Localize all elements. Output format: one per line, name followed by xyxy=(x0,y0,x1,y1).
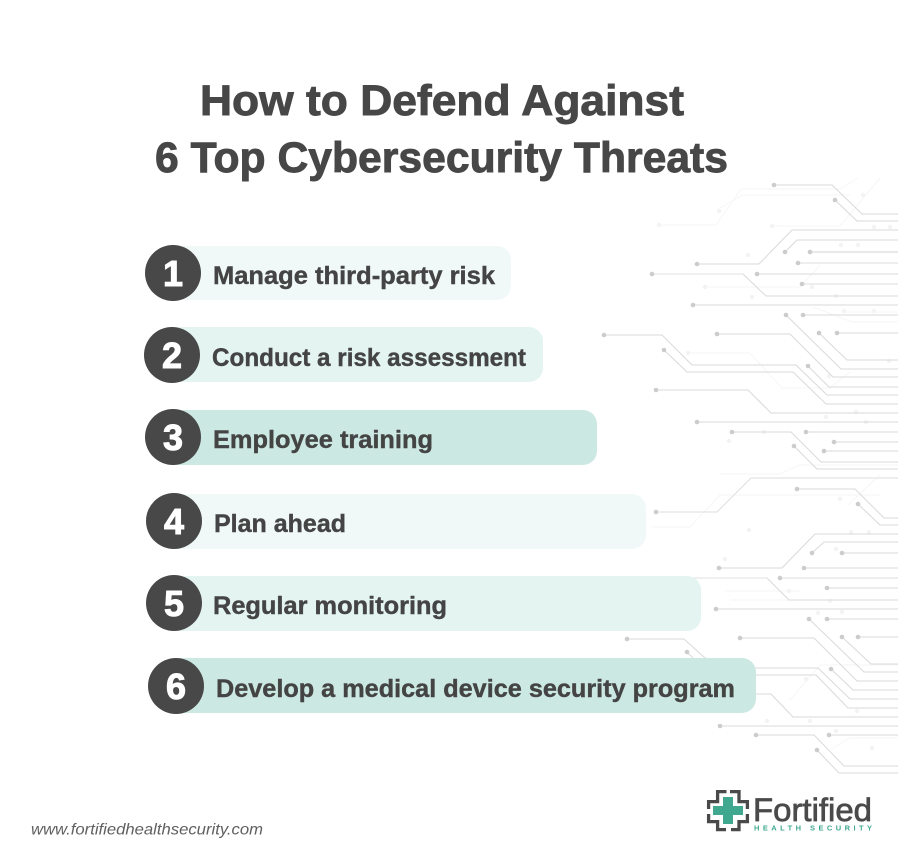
background: faint circuit traces xyxy=(652,178,898,750)
item 2: conduct a risk assessment xyxy=(144,327,543,383)
title: How to Defend Against xyxy=(200,77,684,125)
item 5: regular monitoring: 5 xyxy=(164,583,184,624)
item 3: employee training: Employee training xyxy=(213,426,433,454)
item 5: regular monitoring xyxy=(146,575,701,631)
item 1: manage third-party risk: 1 xyxy=(163,253,183,294)
background: faint circuit nodes xyxy=(657,193,892,750)
circuit traces lower group xyxy=(627,478,898,773)
item 1: manage third-party risk: Manage third-party risk xyxy=(213,262,495,290)
item 1: manage third-party risk xyxy=(145,245,511,301)
circuit nodes lower group xyxy=(625,487,860,752)
item 3: employee training: 3 xyxy=(163,417,183,458)
title: 6 Top Cybersecurity Threats xyxy=(155,134,728,182)
item 3: employee training xyxy=(145,409,597,465)
item 2: conduct a risk assessment: 2 xyxy=(162,335,182,376)
item 6: develop a medical device security program xyxy=(148,658,756,714)
item 4: plan ahead xyxy=(146,493,646,549)
item 4: plan ahead: Plan ahead xyxy=(214,510,346,538)
icon: cross logo xyxy=(709,792,747,830)
item 2: conduct a risk assessment: Conduct a risk assessment xyxy=(212,344,527,372)
item 4: plan ahead: 4 xyxy=(164,501,184,542)
circuit traces upper group xyxy=(604,185,898,469)
item 6: develop a medical device security program: 6 xyxy=(166,666,186,707)
logo: fortified health security xyxy=(709,792,872,832)
logo: fortified health security: HEALTH SECURITY xyxy=(754,824,872,832)
item 6: develop a medical device security program: Develop a medical device security program xyxy=(216,675,735,703)
circuit nodes upper group xyxy=(602,183,839,453)
title xyxy=(155,77,728,182)
logo: fortified health security: Fortified xyxy=(753,792,872,828)
website url: www.fortifiedhealthsecurity.com xyxy=(31,822,263,838)
item 5: regular monitoring: Regular monitoring xyxy=(213,592,447,620)
